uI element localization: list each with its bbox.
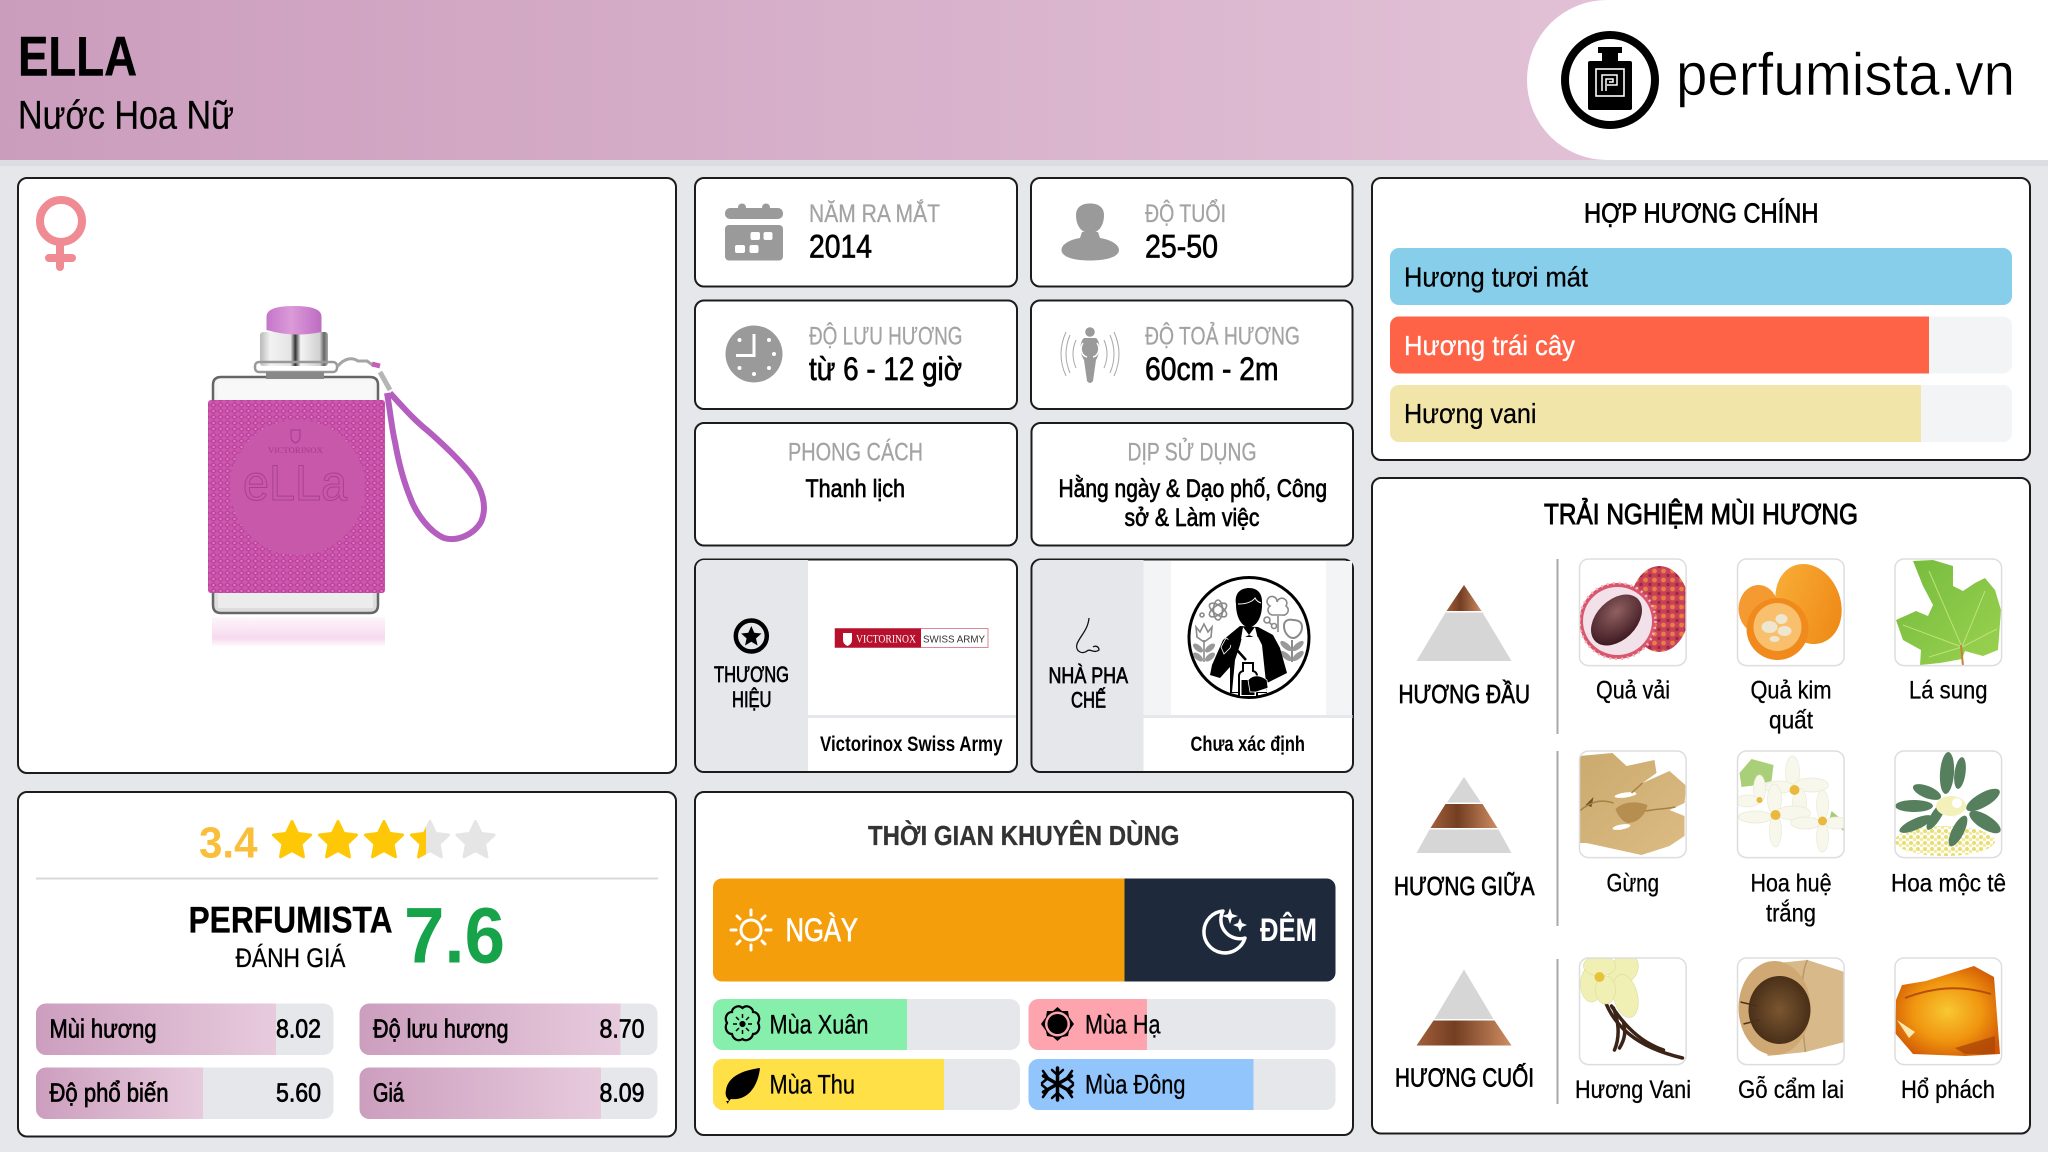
icon: nose <box>1077 618 1099 653</box>
card: brand <box>695 560 1017 772</box>
heading: scent experience: TRẢI NGHIỆM MÙI HƯƠNG <box>1544 497 1858 531</box>
accord bar: fruity: Hương trái cây <box>1404 330 1575 361</box>
ingredient: fig leaf <box>1895 559 2002 666</box>
icon: calendar <box>725 204 783 260</box>
accord bar: fresh <box>1390 248 2012 305</box>
info card: projection <box>1031 300 1352 409</box>
season bar: summer: Mùa Hạ <box>1085 1010 1161 1040</box>
accord bar: fresh: Hương tươi mát <box>1404 262 1588 292</box>
icon: flower <box>726 1006 759 1040</box>
ingredient names: top notes: Lá sung <box>1909 676 1988 704</box>
score bar: longevity: 8.70 <box>600 1014 644 1044</box>
ingredient: tuberose <box>1736 751 1848 858</box>
ingredient names: middle notes: Hoa mộc tê <box>1891 870 2006 898</box>
day and night bar <box>713 878 1336 982</box>
score 7.6: 7.6 <box>404 890 505 980</box>
icon: clock <box>726 326 782 382</box>
info card: age <box>1031 178 1352 286</box>
label: launch year: NĂM RA MẮT <box>809 198 940 228</box>
score bar: scent: 8.02 <box>276 1014 321 1044</box>
icon: female symbol <box>40 200 82 267</box>
season bar: autumn <box>713 1059 1020 1110</box>
accord bar: vanilla: Hương vani <box>1404 398 1536 429</box>
season bar: summer <box>1028 999 1336 1050</box>
ingredient names: middle notes: Hoa huệ <box>1750 870 1832 898</box>
ingredient names: base notes: Hổ phách <box>1901 1076 1995 1104</box>
pyramid: middle tier highlighted <box>1416 777 1512 853</box>
info card: launch year <box>695 178 1017 286</box>
illustration: perfumer <box>1189 578 1309 698</box>
icon: person <box>1062 204 1119 260</box>
label: base notes: HƯƠNG CUỐI <box>1395 1062 1534 1092</box>
logo: perfumista.vn <box>1527 0 2048 160</box>
ingredient names: middle notes: trắng <box>1766 898 1816 928</box>
score bar: price: 8.09 <box>600 1078 644 1108</box>
label: longevity: ĐỘ LƯU HƯƠNG <box>809 322 962 350</box>
heading: main accords: HỢP HƯƠNG CHÍNH <box>1584 198 1818 228</box>
label: middle notes: HƯƠNG GIỮA <box>1394 871 1535 901</box>
ingredient: amber <box>1895 958 2002 1065</box>
ingredient names: base notes: Hương Vani <box>1575 1076 1691 1104</box>
ingredient names: base notes <box>1575 1075 1995 1104</box>
ingredient names: top notes: quất <box>1769 706 1813 734</box>
score bar: scent: Mùi hương <box>50 1014 156 1044</box>
score bar: longevity <box>360 1004 658 1055</box>
brand name: Victorinox Swiss Army <box>820 732 1003 756</box>
row: base notes <box>1395 949 2002 1104</box>
label: age: ĐỘ TUỔI <box>1145 198 1226 228</box>
accord bar: fruity <box>1390 316 2012 374</box>
ingredient: lychee <box>1580 559 1690 666</box>
label: perfumer: NHÀ PHA <box>1048 663 1128 688</box>
pyramid: base tier highlighted <box>1416 970 1512 1046</box>
panel: recommended time <box>695 792 1353 1135</box>
label: brand: HIỆU <box>732 687 772 712</box>
perfumer name: Chưa xác định <box>1190 732 1305 756</box>
info card: style <box>695 423 1017 546</box>
accord bar: vanilla <box>1390 385 2012 442</box>
icon: brand star badge <box>736 620 767 652</box>
perfume bottle: VICTORINOX <box>268 446 323 455</box>
header banner <box>0 0 2048 166</box>
ingredient: ginger <box>1580 751 1686 858</box>
title: ELLA: ELLA <box>18 24 137 88</box>
value: occasion: Hằng ngày & Dạo phố, Công <box>1058 474 1327 503</box>
label: occasion: DỊP SỬ DỤNG <box>1128 436 1256 466</box>
label: rating: ĐÁNH GIÁ <box>236 943 346 973</box>
ingredient: vanilla <box>1580 949 1686 1065</box>
panel: main accords <box>1372 178 2030 460</box>
ingredient names: middle notes: Gừng <box>1606 870 1659 898</box>
logo: Victorinox Swiss Army: VICTORINOX <box>856 632 916 646</box>
subtitle: Nước Hoa Nữ <box>18 94 234 138</box>
label: perfumer: CHẾ <box>1071 688 1106 712</box>
ingredient: kumquat <box>1738 555 1853 666</box>
label: top notes: HƯƠNG ĐẦU <box>1398 679 1530 709</box>
ingredient: osmanthus <box>1895 751 2004 858</box>
value: 25-50: 25-50 <box>1145 228 1218 264</box>
logo: Victorinox Swiss Army <box>835 628 988 648</box>
score bar: price <box>360 1068 658 1119</box>
row: top notes <box>1398 555 2002 734</box>
season bar: autumn: Mùa Thu <box>770 1070 855 1100</box>
row: middle notes <box>1394 751 2006 928</box>
value: longevity: từ 6 - 12 giờ <box>809 351 962 387</box>
ingredient: rosewood <box>1738 958 1844 1065</box>
ingredient names: middle notes <box>1606 870 2006 928</box>
ingredient names: top notes <box>1596 676 1988 734</box>
score bar: popularity: 5.60 <box>276 1078 321 1108</box>
value: occasion: sở & Làm việc <box>1124 504 1260 532</box>
score bar: price: Giá <box>373 1078 404 1108</box>
icon: moon <box>1204 908 1247 953</box>
season bar: winter <box>1028 1059 1336 1110</box>
ingredient names: top notes: Quả vải <box>1596 676 1670 704</box>
label: night: ĐÊM <box>1260 912 1317 948</box>
heading: recommended time: THỜI GIAN KHUYÊN DÙNG <box>868 820 1180 851</box>
season bar: spring: Mùa Xuân <box>770 1010 868 1040</box>
icon: leaf <box>726 1068 760 1104</box>
panel: ratings <box>18 792 676 1136</box>
pyramid: top tier highlighted <box>1416 585 1512 661</box>
icon: summer sun <box>1041 1007 1074 1041</box>
ingredient names: base notes: Gỗ cẩm lai <box>1738 1075 1844 1104</box>
label: style: PHONG CÁCH <box>788 438 923 466</box>
score bar: longevity: Độ lưu hương <box>373 1014 508 1044</box>
label: projection: ĐỘ TOẢ HƯƠNG <box>1145 320 1300 350</box>
score bar: popularity: Độ phổ biến <box>50 1078 168 1108</box>
rating stars <box>273 822 494 857</box>
icon: scent radius <box>1061 327 1119 383</box>
value: style: Thanh lịch <box>806 475 905 503</box>
logo: perfumista.vn: perfumista.vn <box>1676 41 2015 108</box>
label: brand: THƯƠNG <box>714 662 789 687</box>
info card: longevity <box>695 300 1017 409</box>
icon: snowflake <box>1042 1068 1073 1100</box>
user rating number: 3.4 <box>199 818 258 868</box>
value: projection: 60cm - 2m <box>1145 351 1278 387</box>
season bar: winter: Mùa Đông <box>1085 1070 1186 1100</box>
value: 2014: 2014 <box>809 228 872 264</box>
score bar: popularity <box>36 1068 334 1119</box>
score bar: scent <box>36 1004 334 1055</box>
label: Perfumista: PERFUMISTA <box>188 900 392 940</box>
logo: Victorinox Swiss Army: SWISS ARMY <box>923 634 985 646</box>
ingredient names: top notes: Quả kim <box>1750 676 1832 704</box>
panel: product image <box>18 178 676 773</box>
card: perfumer <box>1032 560 1353 772</box>
panel: scent experience <box>1372 478 2030 1134</box>
icon: sun <box>731 910 771 950</box>
season bar: spring <box>713 999 1020 1050</box>
info card: occasion <box>1032 423 1353 546</box>
label: day: NGÀY <box>786 912 858 948</box>
perfume bottle: eLLa <box>243 455 347 511</box>
perfume bottle <box>208 306 484 647</box>
